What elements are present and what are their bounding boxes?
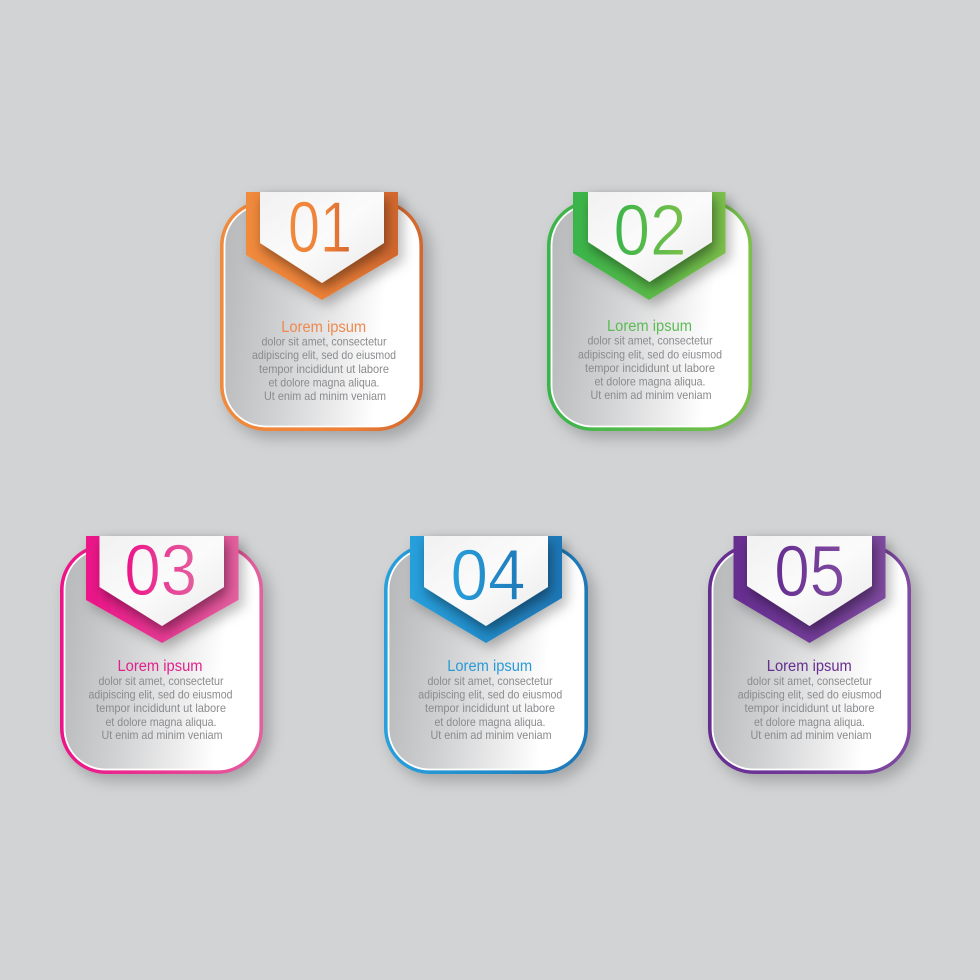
body text: adipiscing elit, sed do eiusmod <box>88 688 232 702</box>
body text: dolor sit amet, consectetur <box>428 674 552 688</box>
inner panel <box>712 548 906 770</box>
body text <box>252 334 396 403</box>
white tag <box>747 536 872 626</box>
ribbon <box>246 192 398 300</box>
body text: adipiscing elit, sed do eiusmod <box>418 688 562 702</box>
body text: dolor sit amet, consectetur <box>262 334 386 348</box>
number 05: 05 <box>774 532 845 612</box>
body text: dolor sit amet, consectetur <box>98 674 224 688</box>
body text: tempor incididunt ut labore <box>585 361 715 375</box>
body text: tempor incididunt ut labore <box>744 701 875 715</box>
body text: Ut enim ad minim veniam <box>590 388 712 402</box>
inner panel <box>388 548 584 770</box>
body text: et dolore magna aliqua. <box>754 715 865 729</box>
body text: tempor incididunt ut labore <box>425 701 555 715</box>
inner panel <box>64 548 258 770</box>
body text: Ut enim ad minim veniam <box>750 728 872 742</box>
number 02: 02 <box>614 191 686 271</box>
body text: dolor sit amet, consectetur <box>747 674 872 688</box>
body text: Ut enim ad minim veniam <box>430 728 552 742</box>
body text <box>738 674 882 742</box>
coloured outline <box>384 544 588 774</box>
ribbon <box>573 192 726 300</box>
ribbon <box>86 536 238 643</box>
card 04 blue <box>384 536 595 781</box>
card 01 orange <box>220 188 431 438</box>
body text <box>418 674 562 742</box>
body text: adipiscing elit, sed do eiusmod <box>738 688 882 702</box>
body text: et dolore magna aliqua. <box>268 376 380 390</box>
inner panel <box>224 204 418 426</box>
ribbon <box>410 536 562 643</box>
card 05 purple <box>708 532 918 781</box>
white tag <box>588 192 712 282</box>
body text: tempor incididunt ut labore <box>259 362 389 376</box>
white tag <box>100 536 224 626</box>
body text: dolor sit amet, consectetur <box>588 334 712 348</box>
coloured outline <box>708 544 911 774</box>
card shadow <box>552 206 759 438</box>
card 03 pink <box>60 531 270 781</box>
body text: Ut enim ad minim veniam <box>264 389 386 403</box>
body text: et dolore magna aliqua. <box>106 715 216 729</box>
body text: et dolore magna aliqua. <box>594 374 706 388</box>
body text <box>88 674 232 742</box>
body text: et dolore magna aliqua. <box>434 715 546 729</box>
coloured outline <box>220 200 423 431</box>
body text: tempor incididunt ut labore <box>96 701 226 715</box>
number 03: 03 <box>124 531 197 611</box>
inner panel <box>552 204 748 426</box>
heading: Lorem ipsum <box>118 658 202 675</box>
number 01: 01 <box>288 188 352 268</box>
card shadow <box>713 551 918 781</box>
body text: adipiscing elit, sed do eiusmod <box>578 348 722 362</box>
white tag <box>260 192 384 283</box>
coloured outline <box>547 200 752 431</box>
card 02 green <box>547 191 759 438</box>
heading: Lorem ipsum <box>447 658 532 675</box>
card shadow <box>389 551 595 781</box>
heading: Lorem ipsum <box>607 318 692 335</box>
white tag <box>424 536 548 626</box>
number 04: 04 <box>450 536 526 616</box>
card shadow <box>65 551 270 781</box>
heading: Lorem ipsum <box>281 319 366 336</box>
card shadow <box>225 206 431 438</box>
ribbon <box>734 536 886 643</box>
heading: Lorem ipsum <box>767 658 852 675</box>
body text <box>578 334 722 402</box>
body text: Ut enim ad minim veniam <box>102 728 223 742</box>
coloured outline <box>60 544 263 774</box>
body text: adipiscing elit, sed do eiusmod <box>252 348 396 362</box>
